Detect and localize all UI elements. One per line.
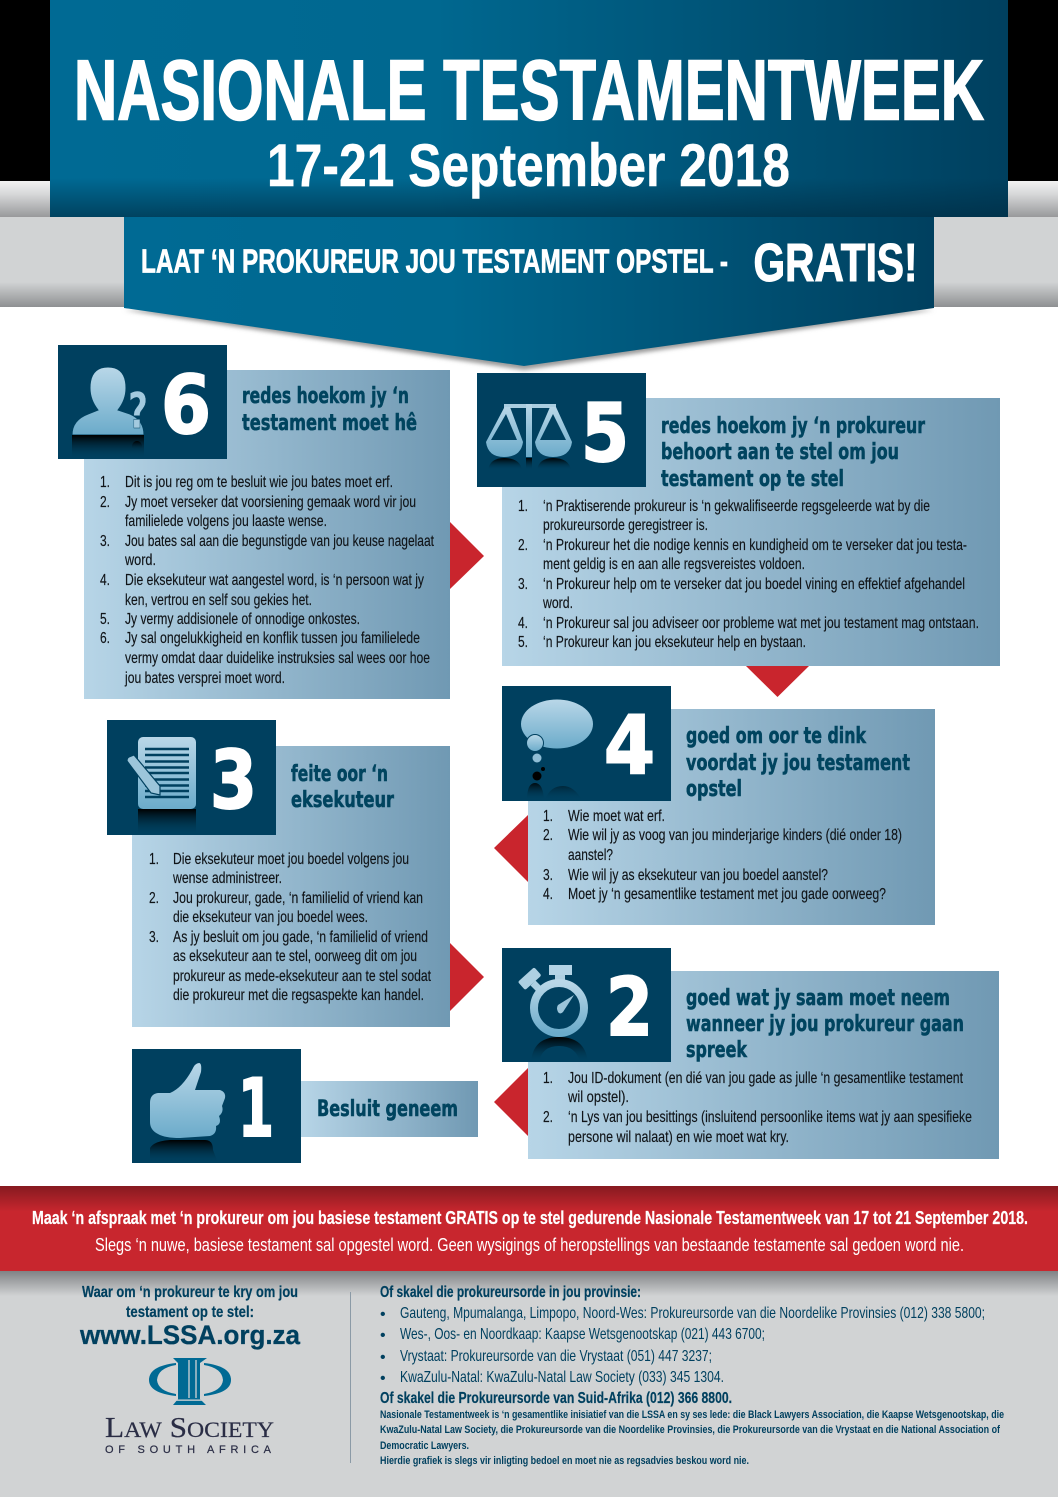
red call-to-action band [0,1186,1058,1271]
icon: thought bubble [521,700,593,800]
list [543,1070,972,1146]
list: 3. [100,533,110,550]
list: Jou prokureur, gade, ‘n familielid of vriend kan [173,890,423,907]
footer right: provincial contacts: • [380,1349,386,1366]
footer fine print: Democratic Lawyers. [380,1440,469,1452]
heading: goed wat jy saam moet neem [686,986,950,1011]
list: Jy sal ongelukkigheid en konflik tussen jou familielede [125,630,420,647]
list: as eksekuteur aan te stel, oorweeg dit om jou [173,948,417,965]
number 3: 3 [210,734,257,827]
list [149,851,431,1004]
footer background [0,1271,1058,1497]
list: prokureur as mede-eksekuteur aan te stel sodat [173,968,431,985]
list: 6. [100,630,110,647]
footer right: provincial contacts: Wes-, Oos- en Noordkaap: Kaapse Wetsgenootskap (021) 443 6700; [400,1326,765,1343]
arrow: 4 to 3 [494,815,528,882]
list [518,498,979,651]
footer right: provincial contacts: Of skakel die Prokureursorde van Suid-Afrika (012) 366 8800. [380,1390,732,1407]
list: 2. [100,494,110,511]
arrow: 2 to 1 [494,1068,528,1136]
footer fine print [380,1409,1004,1467]
panel: 2 goed wat jy saam moet neem [502,948,999,1159]
heading: opstel [686,777,742,802]
list: 1. [100,474,110,491]
list: 5. [518,634,528,651]
list: ken, vertrou en self sou gekies het. [125,592,312,609]
list: Wie moet wat erf. [568,808,665,825]
number 6: 6 [161,359,211,452]
list: 1. [543,1070,553,1087]
list: Jou bates sal aan die begunstigde van jou keuse nagelaat [125,533,434,550]
footer fine print: Hierdie grafiek is slegs vir inligting bedoel en moet nie as regsadvies beskou word nie. [380,1455,749,1467]
heading: testament op te stel [661,467,844,492]
footer right: provincial contacts [380,1284,985,1407]
list: 3. [518,576,528,593]
list: jou bates versprei moet word. [124,670,285,687]
logo: Law Society of South Africa [105,1358,274,1444]
logo name: LAW SOCIETY [105,1412,274,1444]
date: 17-21 September 2018 [267,132,790,199]
panel: 5 redes [477,373,1000,666]
heading: spreek [686,1038,748,1063]
heading [686,724,910,802]
number 1: 1 [238,1062,274,1155]
list: Die eksekuteur moet jou boedel volgens jou [173,851,409,868]
heading [242,384,417,436]
heading: behoort aan te stel om jou [661,440,899,465]
list: 1. [518,498,528,515]
list: 4. [543,886,553,903]
footer right: provincial contacts: Vrystaat: Prokureursorde van die Vrystaat (051) 447 3237; [400,1348,712,1365]
footer left: where to find an attorney: Waar om ‘n prokureur te kry om jou [82,1284,298,1301]
list: 2. [149,890,159,907]
heading: goed om oor te dink [686,724,867,749]
icon: scales [486,404,572,470]
divider [350,1292,351,1463]
list: 1. [543,808,553,825]
footer right: provincial contacts: • [380,1327,386,1344]
icon: person with question mark: ? [128,382,148,440]
list: Dit is jou reg om te besluit wie jou bates moet erf. [125,474,393,491]
list: ‘n Prokureur kan jou eksekuteur help en bystaan. [543,634,806,651]
logo subline: OF SOUTH AFRICA [105,1444,272,1456]
list: 4. [518,615,528,632]
arrow: 5 to 4 [746,666,809,697]
heading [291,762,394,813]
list: word. [542,595,573,612]
gratis: GRATIS! [754,233,918,293]
heading: redes hoekom jy ‘n [242,384,409,409]
panel: 1 besluit geneem [132,1049,478,1163]
number 5: 5 [581,387,629,480]
panel: 4 goed om oor te dink [502,686,935,925]
list: 3. [149,929,159,946]
number 2: 2 [606,961,653,1054]
list: 5. [100,611,110,628]
list: Moet jy ‘n gesamentlike testament met jou gade oorweeg? [568,886,886,903]
list: ment geldig is en aan alle regsvereistes voldoen. [543,556,805,573]
heading: testament moet hê [242,411,417,436]
website: www.LSSA.org.za [79,1320,301,1350]
heading: feite oor ‘n [291,762,388,787]
list: word. [124,552,156,569]
footer right: provincial contacts: Of skakel die prokureursorde in jou provinsie: [380,1284,641,1301]
heading: eksekuteur [291,788,394,813]
icon: document and pencil [127,737,196,835]
list: aanstel? [568,847,613,864]
list: vermy omdat daar duidelike instruksies sal wees oor hoe [125,650,430,667]
icon: thumbs up [150,1063,225,1163]
list: 3. [543,867,553,884]
list: wil opstel). [567,1089,629,1106]
panel: 3 feite [107,720,450,1027]
list: prokureursorde geregistreer is. [543,517,708,534]
arrow: 3 to 2 [450,943,484,1011]
banner text: LAAT ‘N PROKUREUR JOU TESTAMENT OPSTEL - [141,242,728,280]
footer right: provincial contacts: • [380,1370,386,1387]
list: 2. [518,537,528,554]
heading [686,986,964,1063]
heading: voordat jy jou testament [686,751,910,776]
list [543,808,902,903]
list: Die eksekuteur wat aangestel word, is ‘n persoon wat jy [125,572,424,589]
list: Jy moet verseker dat voorsiening gemaak word vir jou [125,494,416,511]
list: Wie wil jy as voog van jou minderjarige kinders (dié onder 18) [568,827,902,844]
footer left: where to find an attorney: testament op te stel: [126,1304,254,1321]
arrow: 6 to 5 [450,522,484,589]
list: Jy vermy addisionele of onnodige onkostes. [125,611,360,628]
icon: stopwatch [518,965,588,1062]
list: die eksekuteur van jou boedel wees. [173,909,368,926]
icon: person with question mark [72,367,148,459]
list: persone wil nalaat) en wie moet wat kry. [568,1129,789,1146]
footer right: provincial contacts: KwaZulu-Natal: KwaZulu-Natal Law Society (033) 345 1304. [400,1369,724,1386]
heading [661,414,925,492]
list: familielede volgens jou laaste wense. [125,513,327,530]
footer right: provincial contacts: • [380,1306,386,1323]
background: grey ribbon [0,217,1058,307]
heading: wanneer jy jou prokureur gaan [686,1012,964,1037]
heading: Besluit geneem [317,1097,458,1122]
number 4: 4 [604,699,655,792]
list: Wie wil jy as eksekuteur van jou boedel aanstel? [568,867,828,884]
footer left: where to find an attorney [79,1284,301,1350]
background: top black corners [0,0,1058,217]
chevron banner [124,217,934,370]
heading: redes hoekom jy ‘n prokureur [661,414,925,439]
list: wense administreer. [172,870,282,887]
list: 2. [543,1109,553,1126]
list: 2. [543,827,553,844]
panel: 6 redes [58,345,450,699]
list: 1. [149,851,159,868]
list [100,474,434,687]
list: die prokureur met die regsaspekte kan handel. [173,987,424,1004]
list: ‘n Praktiserende prokureur is ‘n gekwalifiseerde regsgeleerde wat by die [543,498,930,515]
list: As jy besluit om jou gade, ‘n familielid of vriend [173,929,428,946]
header banner [50,0,1008,217]
list: 4. [100,572,110,589]
